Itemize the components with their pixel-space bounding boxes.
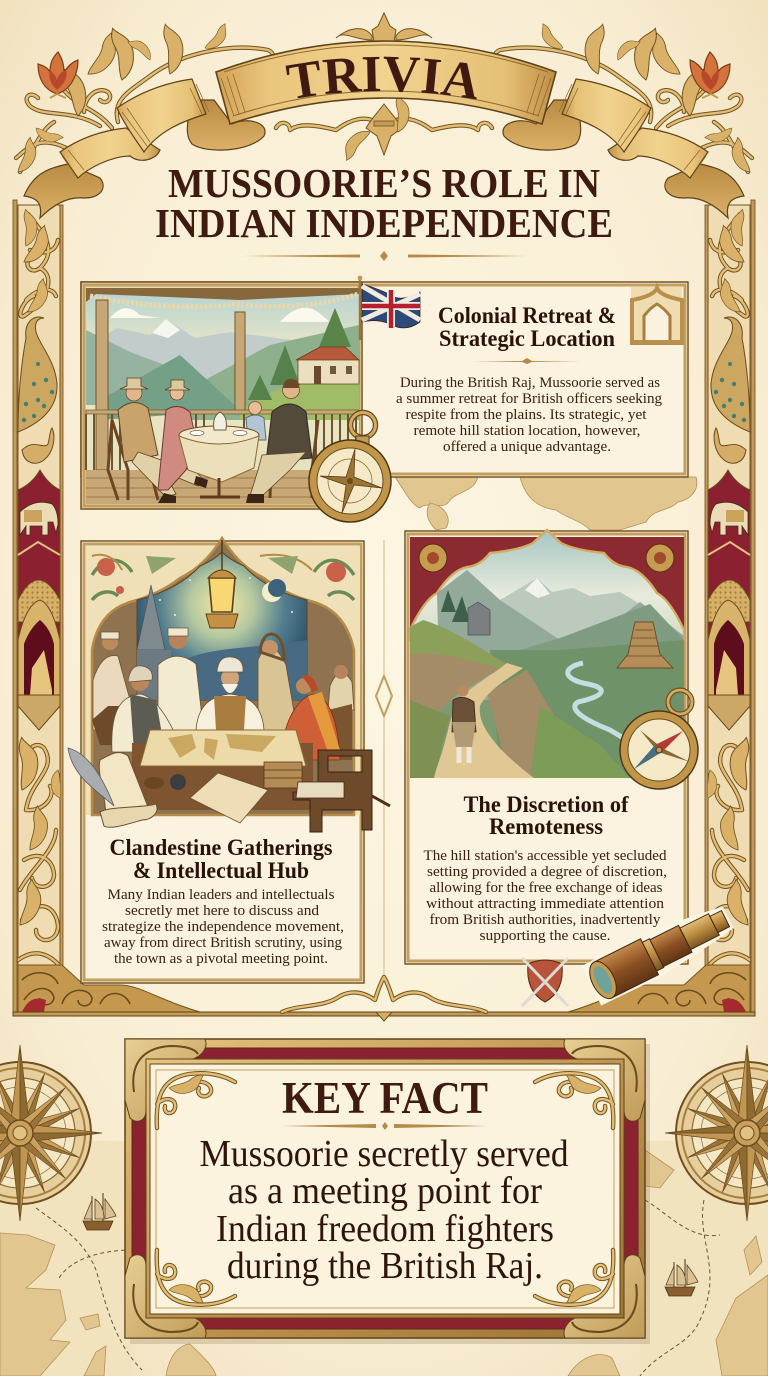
winding path <box>432 663 534 778</box>
panel 3 body text: setting provided a degree of discretion, <box>427 863 667 880</box>
map wash: left <box>0 1141 130 1376</box>
map wash: right <box>640 1141 768 1376</box>
key fact statement: Mussoorie secretly served <box>200 1133 568 1175</box>
icon: quill and scroll <box>68 748 157 827</box>
bottom centre ornament <box>282 977 486 1021</box>
red panel with elephant and dome <box>18 470 60 730</box>
key fact statement: as a meeting point for <box>228 1170 542 1212</box>
panel 3 body text: supporting the cause. <box>480 927 610 944</box>
banner: centre <box>216 41 556 124</box>
ornate corners of outer frame <box>125 1039 645 1338</box>
bottom-left corner ornament <box>18 965 200 1012</box>
panel 2 body text: secretly met here to discuss and <box>125 902 319 919</box>
key fact statement <box>200 1133 568 1287</box>
panel 1 heading line 2: Strategic Location <box>439 326 615 351</box>
panel 1 divider <box>474 358 581 364</box>
icon: compass rose left <box>0 1045 102 1221</box>
panel 3 body text: allowing for the free exchange of ideas <box>430 879 663 896</box>
panel: discretion of remoteness <box>405 530 688 964</box>
panel 3 body text: The hill station's accessible yet secluded <box>424 847 667 864</box>
inner corner scrolls <box>157 1066 613 1312</box>
lower crest below banner <box>276 95 492 160</box>
walking figure <box>452 686 476 763</box>
top crest ornament <box>336 13 432 42</box>
panel: colonial retreat <box>81 282 688 509</box>
icon: telescope <box>581 897 738 1006</box>
standing figures <box>93 628 354 735</box>
panel 2 body text: Many Indian leaders and intellectuals <box>108 886 335 903</box>
figure: man in dark coat <box>246 379 318 503</box>
figure: seated woman <box>158 380 196 490</box>
panel 3 heading: The Discretion of <box>464 792 629 817</box>
panel: key fact <box>125 1039 650 1344</box>
illustration: veranda tea scene <box>86 288 359 504</box>
panel 3 body text: without attracting immediate attention <box>426 895 664 912</box>
key fact statement: during the British Raj. <box>227 1245 543 1287</box>
map lands: left <box>0 1208 216 1376</box>
panel 3 heading line 2: Remoteness <box>489 814 603 839</box>
banner: right ribbon <box>503 79 744 218</box>
panel 2 heading: Clandestine Gatherings <box>110 835 333 860</box>
icon: ship left <box>83 1193 116 1230</box>
panel 1 body text <box>396 374 662 455</box>
panel 2 body text <box>102 886 344 967</box>
icon: compass rose right <box>665 1045 768 1221</box>
panel 2 heading <box>110 835 333 883</box>
panel 2 heading line 2: & Intellectual Hub <box>133 858 309 883</box>
table with world map <box>132 730 313 810</box>
seated man, left <box>112 666 182 752</box>
panel 3 body text: from British authorities, inadvertently <box>430 911 661 928</box>
top floral ornaments right <box>495 24 762 173</box>
panel 2 body text: the town as a pivotal meeting point. <box>114 950 328 967</box>
elder at centre <box>196 657 264 730</box>
banner: left ribbon <box>24 79 265 218</box>
top floral ornaments left <box>6 24 273 173</box>
vertical ornamental divider between panels <box>376 540 392 975</box>
key fact heading: KEY FACT <box>282 1073 488 1123</box>
world map behind the first panel <box>395 477 697 530</box>
icon: small arch <box>630 287 684 345</box>
icon: brass compass, panel 1 <box>309 412 391 522</box>
illustration: mountain path <box>410 530 684 778</box>
right ornamental border column <box>568 200 768 1014</box>
icon: printing press <box>293 750 390 832</box>
panel 1 body text: a summer retreat for British officers seeking <box>396 390 662 407</box>
peacock <box>18 317 57 463</box>
title: TRIVIA: TRIVIA <box>286 56 477 100</box>
panel 1 body text: remote hill station location, however, <box>414 422 640 439</box>
panel 3 body text <box>424 847 667 944</box>
icon: brass compass, panel 3 <box>620 690 698 789</box>
panel 3 heading <box>464 792 629 839</box>
panel: clandestine gatherings <box>81 538 364 983</box>
heading: line 1: MUSSOORIE’S ROLE IN <box>168 160 600 206</box>
panel 1 heading: Colonial Retreat & <box>438 303 616 328</box>
floral spandrels <box>92 555 354 600</box>
icon: shield and crossed swords <box>522 958 568 1006</box>
temple <box>617 622 673 668</box>
woman in red sari <box>282 675 340 760</box>
key fact statement: Indian freedom fighters <box>216 1208 554 1250</box>
left ornamental border column <box>0 200 200 1014</box>
illustration: night meeting <box>86 538 360 823</box>
panel 1 body text: offered a unique advantage. <box>443 438 611 455</box>
heading: line 2: INDIAN INDEPENDENCE <box>155 200 613 246</box>
hanging lantern <box>206 540 238 628</box>
icon: ship right <box>665 1259 698 1296</box>
figure: seated man <box>108 378 208 503</box>
panel 1 body text: During the British Raj, Mussoorie served as <box>400 374 660 391</box>
map lands: right <box>568 1150 768 1376</box>
panel 2 body text: strategize the independence movement, <box>102 918 344 935</box>
river <box>568 663 634 742</box>
figure: child <box>246 402 266 440</box>
bottom frame rule <box>13 1012 755 1016</box>
panel 1 heading <box>438 303 616 351</box>
panel 1 body text: respite from the plains. Its strategic, yet <box>406 406 647 423</box>
icon: flagpole and union flag <box>358 276 420 340</box>
panel 2 body text: away from direct British scrutiny, using <box>104 934 342 951</box>
heading divider <box>242 251 526 261</box>
key fact divider <box>282 1122 488 1130</box>
table with tea set <box>179 412 259 497</box>
